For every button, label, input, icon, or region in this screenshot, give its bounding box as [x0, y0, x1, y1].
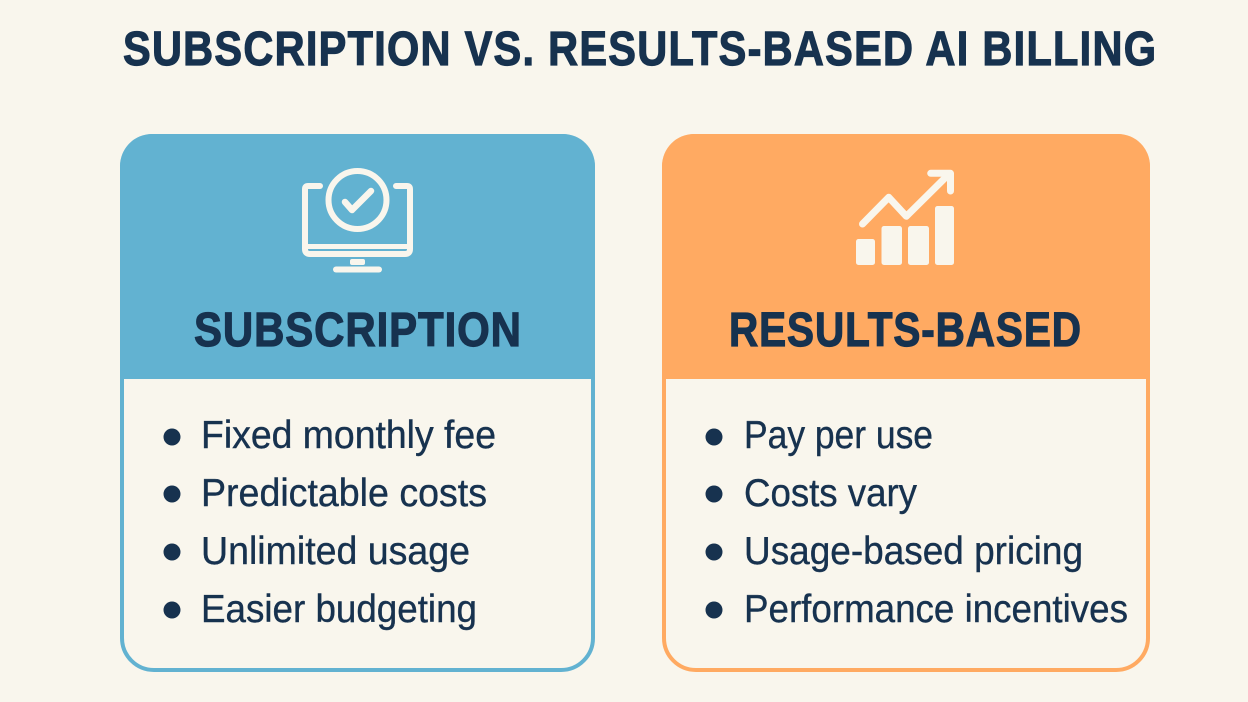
list: subscription features: Unlimited usage: [201, 529, 470, 572]
list: results-based features: Costs vary: [744, 471, 917, 514]
panel heading: results-based: RESULTS-BASED: [729, 304, 1081, 357]
panel background: [122, 136, 593, 670]
icon: monitor with check: [305, 171, 410, 270]
list: subscription features: Fixed monthly fee: [201, 413, 496, 456]
panel header: [662, 134, 1150, 379]
panel background: [664, 136, 1148, 670]
list: results-based features: Pay per use: [744, 413, 933, 456]
panel heading: subscription: SUBSCRIPTION: [194, 302, 521, 357]
icon: growth chart: [856, 173, 954, 265]
list: subscription features: [164, 413, 496, 630]
list: subscription features: Easier budgeting: [201, 587, 477, 630]
list: results-based features: Usage-based pricing: [744, 529, 1083, 572]
panel header: [120, 134, 595, 379]
title: SUBSCRIPTION VS. RESULTS-BASED AI BILLING: [123, 21, 1156, 76]
list: results-based features: Performance incentives: [744, 587, 1128, 630]
panel: results-based: [662, 134, 1150, 670]
panel: subscription: [120, 134, 595, 670]
list: results-based features: [706, 413, 1128, 630]
list: subscription features: Predictable costs: [201, 471, 487, 514]
